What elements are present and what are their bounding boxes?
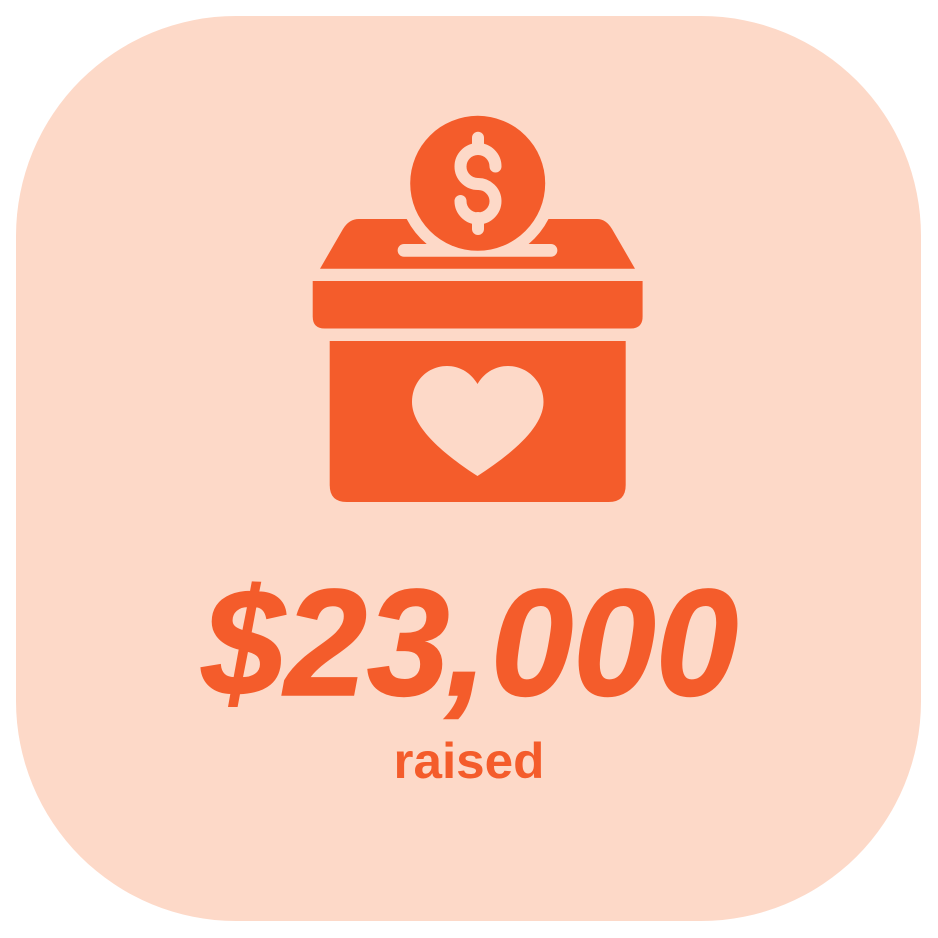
icon: coin xyxy=(410,116,545,251)
icon: box body xyxy=(330,341,626,502)
icon: box lid band xyxy=(313,281,643,328)
label: raised: raised xyxy=(394,733,544,789)
icon: box lid top with slot xyxy=(320,219,635,269)
amount text: $23,000 xyxy=(201,557,738,727)
icon: heart xyxy=(412,366,544,476)
icon: donation box with coin and heart xyxy=(313,116,643,502)
icon: dollar sign on coin xyxy=(460,138,496,229)
